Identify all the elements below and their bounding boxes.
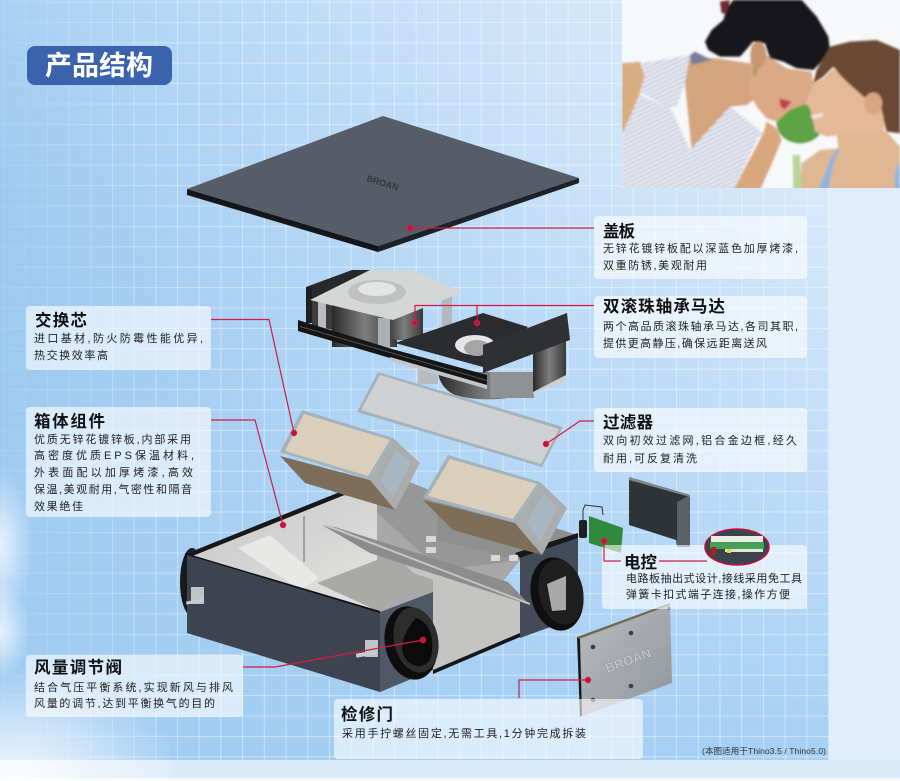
- note: applicable models: (本图适用于Thino3.5 / Thino5.0): [702, 746, 826, 756]
- panel: housing callout: 外表面配以加厚烤漆,高效: [34, 465, 193, 479]
- panel: electrical control callout: [602, 545, 807, 609]
- panel: cover plate callout: 无锌花镀锌板配以深蓝色加厚烤漆,: [603, 241, 798, 255]
- illustration: front air duct: [378, 601, 444, 685]
- photo: mother and daughter: [622, 0, 900, 190]
- panel: electrical control callout: 电路板抽出式设计,接线采用免工具: [626, 571, 802, 585]
- panel: cover plate callout: [594, 216, 807, 279]
- leader: heat exchange core: [211, 320, 297, 436]
- illustration: circuit board: [579, 505, 623, 553]
- panel: cover plate callout: 盖板: [603, 221, 636, 241]
- panel: motors callout: 提供更高静压,确保远距离送风: [603, 336, 767, 350]
- illustration: heat exchange core right: [423, 455, 567, 555]
- leader: air damper: [243, 637, 426, 667]
- panel: motors callout: 双滚珠轴承马达: [603, 296, 726, 316]
- leader: cover plate: [407, 225, 594, 231]
- panel: access door callout: [334, 699, 643, 759]
- panel: air damper callout: 风量调节阀: [34, 658, 122, 677]
- panel: motors callout: 两个高品质滚珠轴承马达,各司其职,: [603, 319, 798, 333]
- panel: housing callout: [26, 407, 211, 517]
- illustration: filter: [357, 372, 563, 467]
- illustration: cover plate: BROAN: [365, 173, 400, 193]
- icon: terminal block magnifier: [705, 529, 769, 565]
- panel: electrical control callout: 弹簧卡扣式端子连接,操作方便: [626, 587, 790, 601]
- leader: motors: [412, 306, 594, 326]
- panel: access door callout: 检修门: [341, 704, 393, 724]
- panel: cover plate callout: 双重防锈,美观耐用: [603, 258, 707, 272]
- panel: filter callout: 过滤器: [603, 413, 654, 432]
- panel: air damper callout: 结合气压平衡系统,实现新风与排风: [34, 680, 233, 694]
- illustration: cover plate: [187, 116, 579, 252]
- panel: heat exchange core callout: 进口基材,防火防霉性能优异,: [34, 331, 203, 345]
- illustration: rear air duct: [524, 552, 590, 636]
- panel: filter callout: 耐用,可反复清洗: [603, 451, 697, 465]
- panel: filter callout: [594, 408, 807, 472]
- panel: filter callout: 双向初效过滤网,铝合金边框,经久: [603, 433, 797, 447]
- leader lines and dots: [211, 225, 707, 698]
- panel: heat exchange core callout: 热交换效率高: [34, 348, 108, 362]
- panel: access door callout: 采用手拧螺丝固定,无需工具,1分钟完成拆装: [342, 726, 586, 740]
- panel: housing callout: 效果绝佳: [34, 499, 83, 513]
- panel: housing callout: 箱体组件: [34, 412, 105, 431]
- leader: filter: [543, 421, 594, 447]
- leader: electrical control: [601, 538, 707, 561]
- leader: access door: [519, 677, 591, 698]
- illustration: access door: [577, 603, 672, 717]
- illustration: twin ball-bearing motors: [298, 270, 570, 399]
- panel: air damper callout: [26, 655, 243, 717]
- panel: housing callout: 高密度优质EPS保温材料,: [34, 448, 194, 462]
- heading badge: product structure: [27, 46, 172, 85]
- panel: air damper callout: 风量的调节,达到平衡换气的目的: [34, 696, 215, 710]
- panel: heat exchange core callout: [26, 306, 211, 370]
- panel: housing callout: 优质无锌花镀锌板,内部采用: [34, 432, 191, 446]
- leader: housing: [211, 420, 286, 528]
- illustration: heat exchange core left: [280, 410, 420, 510]
- illustration: access door: BROAN: [603, 645, 653, 676]
- panel: electrical control callout: 电控: [624, 553, 658, 572]
- panel: housing callout: 保温,美观耐用,气密性和隔音: [34, 482, 192, 496]
- illustration: electrical cover: [629, 477, 690, 547]
- illustration: housing body: [180, 478, 578, 692]
- panel: motors callout: [594, 296, 807, 358]
- panel: heat exchange core callout: 交换芯: [35, 310, 87, 330]
- heading badge: product structure: 产品结构: [45, 51, 153, 81]
